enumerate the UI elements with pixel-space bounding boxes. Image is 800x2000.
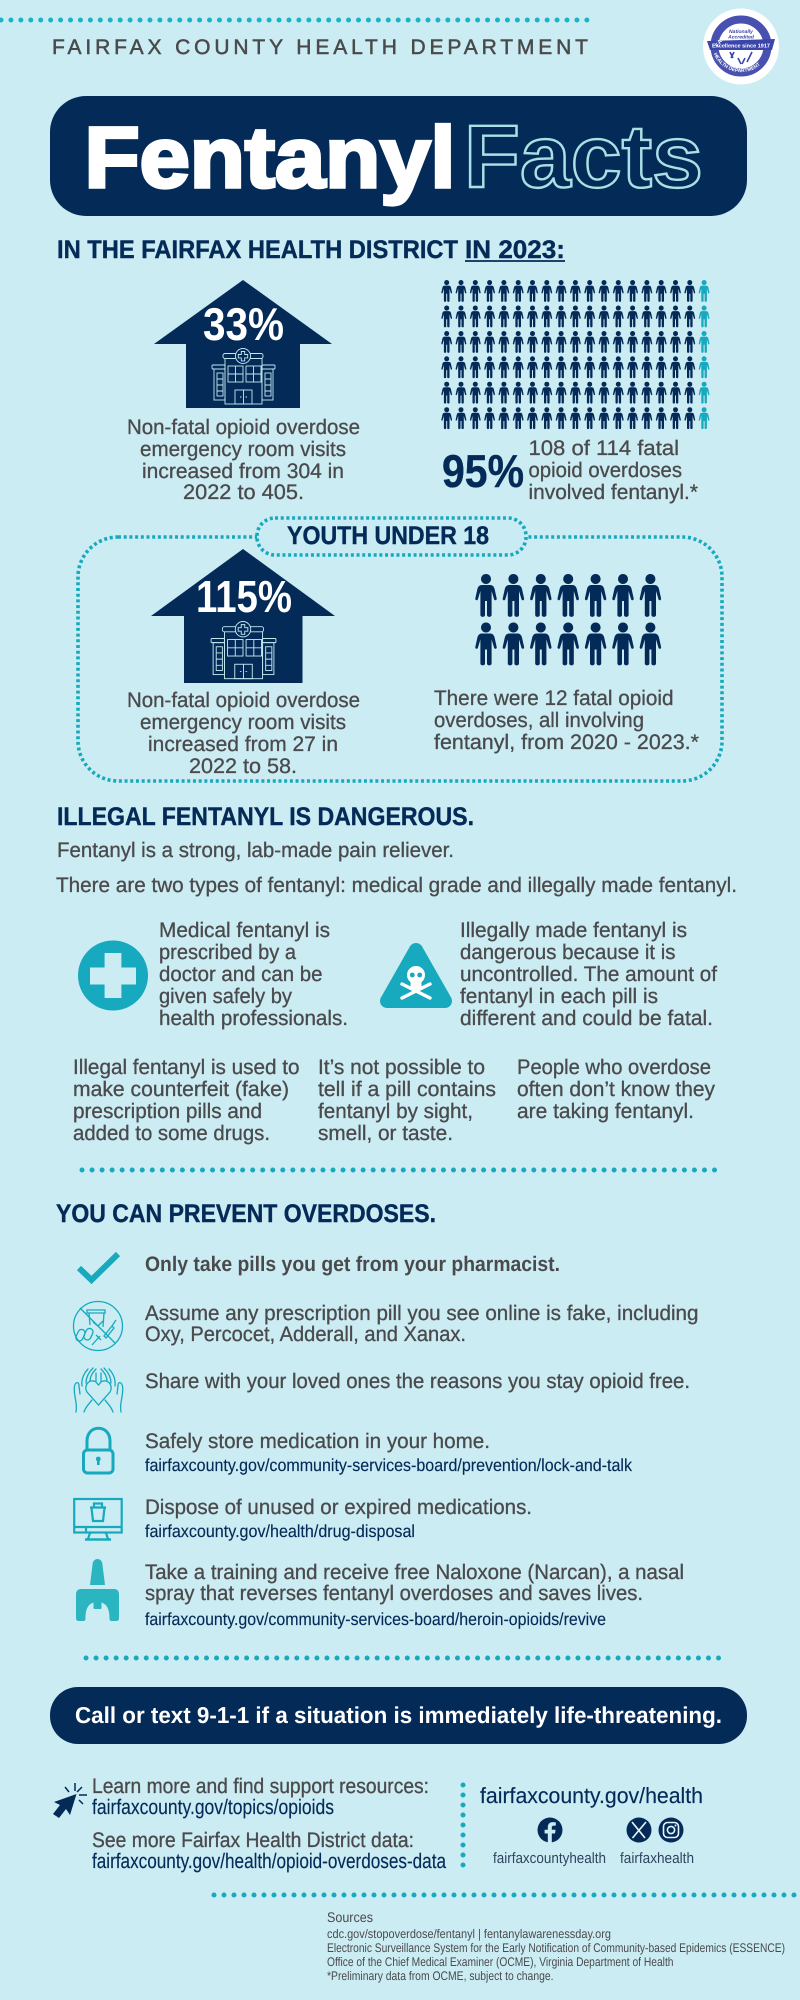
heading: in the Fairfax Health District in 2023: IN THE FAIRFAX HEALTH DISTRICT	[57, 236, 458, 264]
callout: call or text 9-1-1	[50, 1687, 747, 1744]
text: assume pills are fake: Assume any prescription pill you see online is fake, including	[145, 1302, 698, 1325]
stat: 95%: opioid overdoses	[528, 459, 682, 482]
text: illegally made fentanyl: dangerous because it is	[460, 941, 676, 964]
icon: naloxone nasal spray	[76, 1559, 119, 1621]
text: 12 fatal overdoses: fentanyl, from 2020 - 2023.*	[434, 731, 699, 754]
text: medical fentanyl: given safely by	[159, 985, 292, 1008]
icon: check mark	[79, 1254, 118, 1280]
text: safely store medication: Safely store medication in your home.	[145, 1430, 490, 1453]
text: fentanyl introduction: There are two types of fentanyl: medical grade and illegally made fentanyl.	[56, 874, 737, 897]
text: 12 fatal overdoses: There were 12 fatal opioid	[434, 687, 674, 710]
text: medical fentanyl: Medical fentanyl is	[159, 919, 330, 942]
text: safely store medication	[145, 1430, 632, 1475]
text: 115% description	[127, 689, 360, 778]
text: 115% description: Non-fatal opioid overdose	[127, 689, 360, 712]
text: counterfeit pills	[73, 1056, 300, 1145]
text: cannot tell by sight: smell, or taste.	[318, 1122, 453, 1145]
label: youth under 18: YOUTH UNDER 18	[287, 522, 489, 550]
text: sources: *Preliminary data from OCME, subject to change.	[327, 1969, 554, 1983]
text: see more data	[92, 1829, 446, 1873]
text: website: fairfaxcounty.gov/health	[480, 1783, 703, 1808]
text: sources: cdc.gov/stopoverdose/fentanyl | fentanylawarenessday.org	[327, 1927, 611, 1941]
icon: up arrow with hospital: 33%	[203, 298, 284, 350]
text: 33% description: Non-fatal opioid overdose	[127, 416, 360, 439]
icon: padlock	[84, 1428, 113, 1473]
text: counterfeit pills: make counterfeit (fake)	[73, 1078, 289, 1101]
text: dispose of medication	[145, 1496, 532, 1541]
callout: call or text 9-1-1: Call or text 9-1-1 if a situation is immediately life-threatening.	[75, 1702, 722, 1728]
heading: in the Fairfax Health District in 2023: IN 2023:	[465, 236, 565, 264]
text: illegally made fentanyl: different and could be fatal.	[460, 1007, 713, 1030]
text: counterfeit pills: Illegal fentanyl is used to	[73, 1056, 300, 1079]
icon: medical cross	[78, 940, 148, 1010]
text: 12 fatal overdoses	[434, 687, 699, 754]
text: dispose of medication: Dispose of unused or expired medications.	[145, 1496, 532, 1519]
text: 33% description: 2022 to 405.	[183, 481, 304, 504]
text: cannot tell by sight: fentanyl by sight,	[318, 1100, 473, 1123]
logo: county health department seal: Excellence since 1917	[712, 42, 770, 50]
text: people who overdose: are taking fentanyl.	[517, 1100, 694, 1123]
title banner	[50, 96, 747, 216]
text: medical fentanyl	[159, 919, 348, 1030]
icon: X	[626, 1818, 652, 1842]
text: only take pills: Only take pills you get from your pharmacist.	[145, 1253, 560, 1276]
text: 33% description: increased from 304 in	[142, 460, 344, 483]
text: safely store medication: fairfaxcounty.gov/community-services-board/prevention/lock-and-talk	[145, 1455, 632, 1475]
logo: county health department seal: Nationally	[729, 29, 753, 35]
text: see more data: fairfaxcounty.gov/health/opioid-overdoses-data	[92, 1850, 446, 1873]
text: 33% description	[127, 416, 360, 504]
text: naloxone training	[145, 1561, 684, 1629]
chart: 14 person pictogram	[475, 574, 661, 665]
text: people who overdose: often don’t know they	[517, 1078, 715, 1101]
text: counterfeit pills: added to some drugs.	[73, 1122, 270, 1145]
text: see more data: See more Fairfax Health District data:	[92, 1829, 414, 1852]
text: assume pills are fake	[145, 1302, 698, 1346]
icon: facebook	[538, 1818, 562, 1842]
text: naloxone training: fairfaxcounty.gov/community-services-board/heroin-opioids/revive	[145, 1609, 606, 1629]
text: sources	[327, 1909, 785, 1983]
stat: 95%: 95%	[442, 445, 524, 497]
text: 115% description: 2022 to 58.	[189, 755, 297, 778]
text: 33% description: emergency room visits	[140, 438, 346, 461]
heading: illegal fentanyl is dangerous: ILLEGAL FENTANYL IS DANGEROUS.	[57, 803, 474, 831]
text: 115% description: emergency room visits	[140, 711, 346, 734]
text: medical fentanyl: health professionals.	[159, 1007, 348, 1030]
text: fentanyl introduction: Fentanyl is a strong, lab-made pain reliever.	[57, 839, 454, 862]
text: 12 fatal overdoses: overdoses, all involving	[434, 709, 644, 732]
text: cannot tell by sight	[318, 1056, 496, 1145]
icon: up arrow with hospital, 115%	[151, 549, 335, 683]
icon: hands holding heart	[74, 1368, 123, 1412]
text: counterfeit pills: prescription pills and	[73, 1100, 262, 1123]
logo: county health department seal: FAIRFAX COUNTY	[715, 38, 758, 47]
text: learn more and find support: Learn more and find support resources:	[92, 1775, 429, 1798]
logo: county health department seal: Accredited	[727, 34, 755, 40]
text: people who overdose: People who overdose	[517, 1056, 711, 1079]
logo: county health department seal	[703, 8, 779, 84]
text: learn more and find support: fairfaxcounty.gov/topics/opioids	[92, 1796, 334, 1819]
panel: youth under 18	[78, 518, 722, 781]
text: share with loved ones: Share with your loved ones the reasons you stay opioid free.	[145, 1370, 690, 1393]
icon: up arrow with hospital, 115%: 115%	[196, 571, 292, 622]
text: illegally made fentanyl: uncontrolled. The amount of	[460, 963, 717, 986]
text: assume pills are fake: Oxy, Percocet, Adderall, and Xanax.	[145, 1323, 466, 1346]
logo: county health department seal: HEALTH DEPARTMENT	[714, 52, 760, 72]
organisation name: FAIRFAX COUNTY HEALTH DEPARTMENT	[52, 36, 588, 59]
icon: no pills	[74, 1302, 122, 1350]
chart: 114 person pictogram	[441, 280, 709, 429]
text: cannot tell by sight: tell if a pill contains	[318, 1078, 496, 1101]
text: fentanyl introduction	[56, 839, 737, 897]
text: sources: Office of the Chief Medical Examiner (OCME), Virginia Department of Health	[327, 1955, 674, 1969]
stat: 95%	[442, 437, 698, 504]
text: naloxone training: spray that reverses fentanyl overdoses and saves lives.	[145, 1582, 643, 1605]
label: youth under 18	[257, 518, 526, 555]
title banner: Facts	[464, 106, 703, 206]
text: social handles	[493, 1850, 694, 1867]
text: social handles: fairfaxhealth	[620, 1850, 694, 1867]
panel: 33% ER visits	[127, 280, 360, 504]
icon: click cursor	[53, 1783, 87, 1818]
stat: 95%: 108 of 114 fatal	[528, 437, 679, 460]
icon: up arrow with hospital	[154, 280, 332, 408]
text: illegally made fentanyl: Illegally made fentanyl is	[460, 919, 687, 942]
icon: warning triangle with skull	[387, 950, 445, 1001]
text: people who overdose	[517, 1056, 715, 1123]
text: learn more and find support	[92, 1775, 429, 1819]
heading: you can prevent overdoses: YOU CAN PREVENT OVERDOSES.	[56, 1200, 436, 1228]
title banner: Fentanyl	[84, 110, 456, 206]
text: 115% description: increased from 27 in	[148, 733, 338, 756]
text: naloxone training: Take a training and receive free Naloxone (Narcan), a nasal	[145, 1561, 684, 1584]
text: social handles: fairfaxcountyhealth	[493, 1850, 606, 1867]
text: medical fentanyl: doctor and can be	[159, 963, 322, 986]
text: cannot tell by sight: It’s not possible to	[318, 1056, 485, 1079]
text: sources: Sources	[327, 1909, 373, 1925]
icon: computer with trash can	[74, 1499, 122, 1540]
panel: 95% of fatal overdoses	[441, 280, 709, 504]
stat: 95%: involved fentanyl.*	[528, 481, 698, 504]
text: dispose of medication: fairfaxcounty.gov/health/drug-disposal	[145, 1521, 415, 1541]
text: illegally made fentanyl	[460, 919, 717, 1030]
text: medical fentanyl: prescribed by a	[159, 941, 296, 964]
text: illegally made fentanyl: fentanyl in each pill is	[460, 985, 658, 1008]
icon: instagram	[658, 1818, 684, 1842]
